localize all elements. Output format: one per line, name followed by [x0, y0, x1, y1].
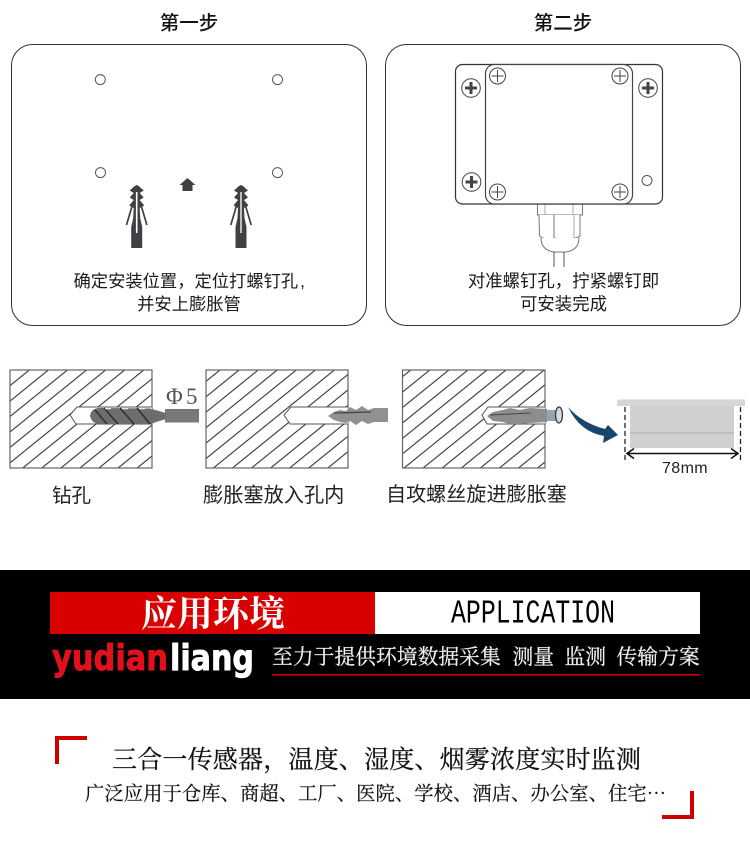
- slogan: 至力于提供环境数据采集: [272, 646, 501, 669]
- label: phi 5: [166, 384, 198, 409]
- diagram: insert wall plug: [206, 370, 388, 468]
- logo: yudianliang: yudian: [52, 638, 168, 679]
- logo: yudianliang: liang: [170, 638, 254, 679]
- diagram: screw into plug: [402, 370, 562, 468]
- heading block: English title: [375, 592, 700, 634]
- heading: step one: 第一步: [160, 12, 218, 34]
- diagram: product width: [617, 400, 745, 477]
- label: drilling: 钻孔: [52, 485, 91, 507]
- label: insert plug: 膨胀塞放入孔内: [203, 484, 344, 507]
- diagram: drilling: [10, 370, 199, 468]
- icon: left wall plug: [126, 185, 147, 248]
- panel: application band: [0, 570, 750, 699]
- logo: yudianliang: [52, 638, 254, 679]
- label: screw in: 自攻螺丝旋进膨胀塞: [386, 483, 567, 506]
- icon: plug and screw: [487, 407, 562, 424]
- icon: drill bit: [90, 408, 199, 424]
- label: phi 5: 5: [186, 384, 198, 409]
- panel: step two: [386, 44, 740, 326]
- icon: bottom-right red bracket: [662, 791, 694, 819]
- heading block: Chinese title: 应用环境: [141, 594, 285, 634]
- text: step one description: [74, 271, 305, 314]
- panel: step one: [12, 44, 366, 326]
- icon: top-left red bracket: [55, 736, 87, 764]
- label: phi 5: Φ: [166, 384, 183, 409]
- product body: [630, 406, 734, 448]
- heading block: English title: APPLICATION: [451, 596, 615, 632]
- product flange: [617, 400, 745, 406]
- text: headline: 三合一传感器，温度、湿度、烟雾浓度实时监测: [112, 746, 641, 774]
- text: step one description: 并安上膨胀管: [137, 294, 241, 314]
- icon: wall plug: [328, 406, 388, 425]
- icon: enclosure base: [456, 64, 662, 204]
- icon: cable gland: [538, 204, 582, 267]
- text: step two description: 对准螺钉孔，拧紧螺钉即: [468, 271, 659, 291]
- dimension label: 78mm: [662, 460, 708, 477]
- heading: step two: 第二步: [534, 12, 592, 34]
- icon: flange screws: [462, 79, 657, 191]
- icon: empty mounting hole: [642, 176, 652, 186]
- text: step one description: 确定安装位置，定位打螺钉孔,: [74, 271, 305, 291]
- text: step two description: [468, 271, 659, 314]
- dimension guides: [625, 407, 740, 460]
- icon: four mounting holes: [95, 75, 282, 178]
- icon: curved blue arrow: [568, 407, 618, 443]
- slogan: 传输方案: [616, 646, 700, 669]
- heading block: Chinese title: [50, 592, 375, 634]
- icon: enclosure lid: [486, 64, 632, 204]
- slogan: 测量: [512, 646, 554, 669]
- dimension arrow: [627, 448, 738, 458]
- icon: lid screws: [490, 68, 628, 200]
- slogan underline: [272, 674, 700, 676]
- slogan: 监测: [564, 646, 606, 669]
- icon: right wall plug: [231, 185, 251, 248]
- icon: up arrow: [180, 178, 196, 191]
- text: usage places: 广泛应用于仓库、商超、工厂、医院、学校、酒店、办公室、住宅…: [85, 778, 666, 806]
- text: step two description: 可安装完成: [520, 294, 607, 314]
- slogan: [272, 646, 700, 669]
